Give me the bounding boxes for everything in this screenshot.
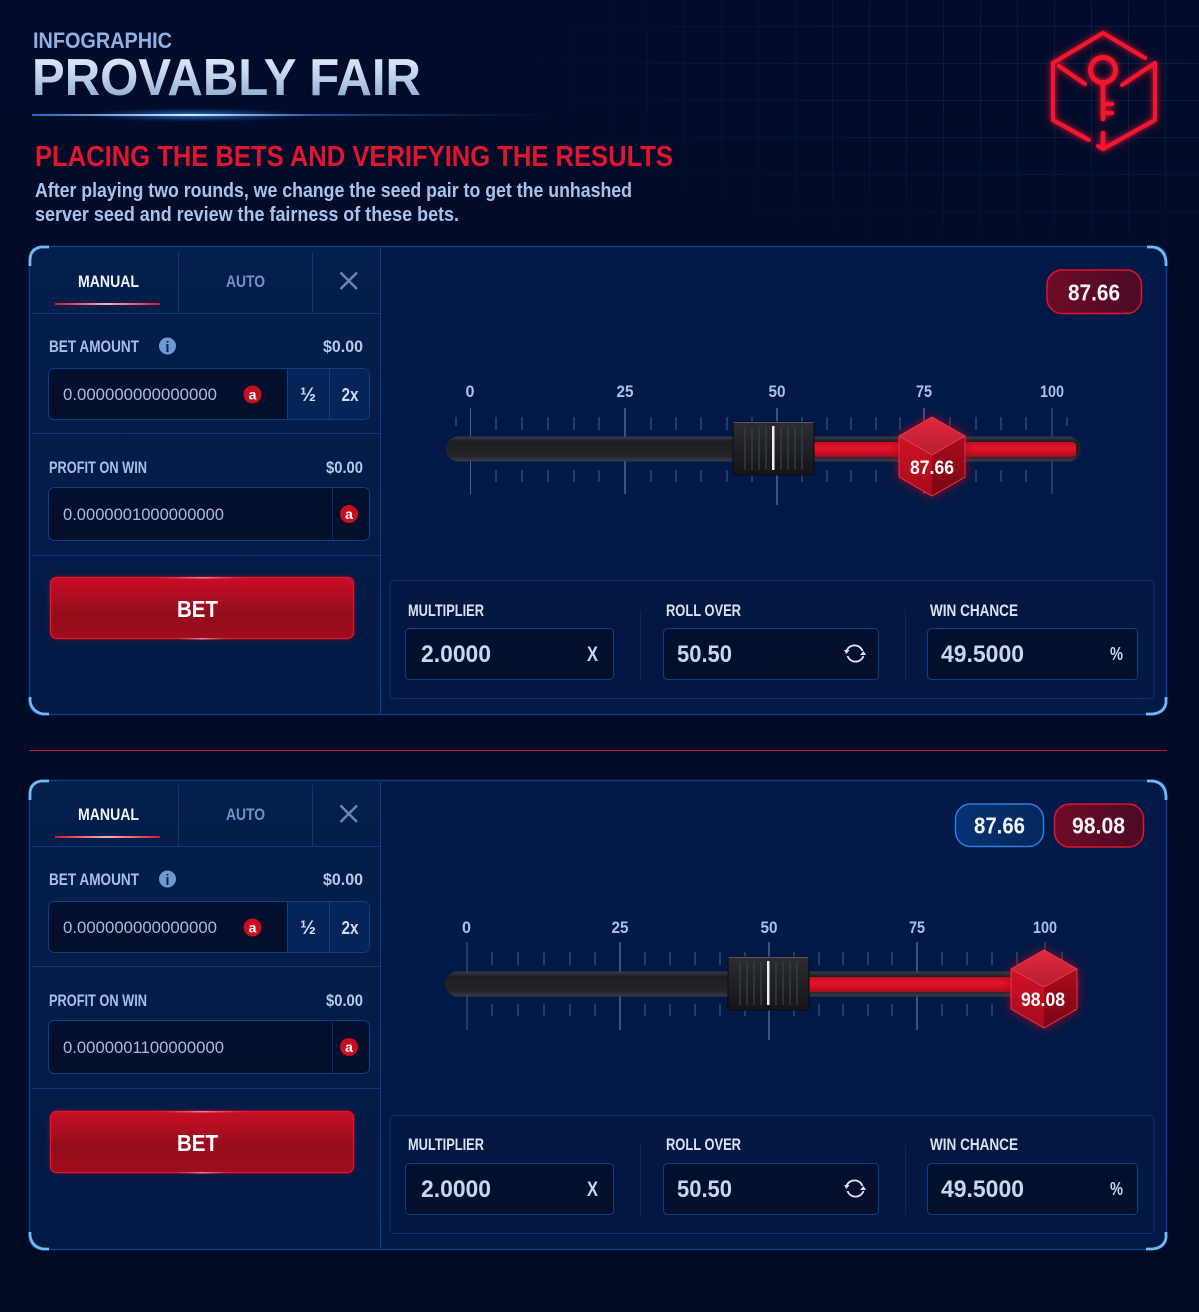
section heading: PLACING THE BETS AND VERIFYING THE RESULTS: [35, 141, 673, 173]
label: profit on win: PROFIT ON WIN: [49, 458, 147, 477]
bet button: [50, 577, 354, 640]
input: profit on win: [48, 488, 370, 540]
icon: info: i: [165, 339, 170, 356]
result cube: 98.08: 98.08: [1021, 990, 1065, 1011]
icon: close: [340, 272, 357, 289]
tab: manual: MANUAL: [78, 272, 139, 291]
stats panel: [390, 1116, 1154, 1234]
win chance field: 49.5000: [941, 641, 1024, 668]
bet amount usd: $0.00: [323, 337, 363, 356]
result pill: 87.66: 87.66: [1068, 280, 1120, 306]
bet button: BET: [177, 596, 218, 622]
panel: second round: [30, 780, 1166, 1250]
scale labels: 50: [760, 918, 778, 937]
roll over field: [664, 1135, 878, 1214]
result pill: 98.08 red: [1054, 804, 1144, 847]
ticks: [467, 942, 1062, 1040]
result cube: 87.66: 87.66: [910, 458, 954, 479]
multiplier field: [406, 1135, 614, 1214]
scale labels: [466, 382, 1064, 401]
scale labels: [462, 918, 1057, 937]
corner brackets: [30, 781, 1166, 1249]
multiplier field: X: [587, 1178, 598, 1201]
left column: bet form: [32, 248, 380, 714]
input: profit on win: a: [345, 1039, 353, 1055]
stats panel: [390, 580, 1154, 698]
tab: manual: MANUAL: [78, 805, 139, 824]
corner brackets: [30, 247, 1166, 714]
multiplier field: [406, 601, 614, 680]
glowing title rule: [32, 108, 560, 122]
input: bet amount: a: [249, 920, 257, 936]
win chance field: WIN CHANCE: [930, 1135, 1018, 1154]
tab: manual: [55, 805, 160, 838]
scale labels: 100: [1040, 382, 1064, 401]
icon: info: [159, 870, 176, 889]
input: bet amount: 2x: [342, 918, 358, 938]
track: [446, 436, 1081, 462]
win chance field: %: [1110, 1179, 1123, 1199]
section description: After playing two rounds, we change the seed pair to get the unhashed: [35, 180, 632, 202]
result pill: 87.66 blue: [956, 804, 1044, 846]
result pill: 98.08 red: 98.08: [1072, 812, 1125, 838]
header: [32, 28, 421, 107]
result cube: 98.08: [1011, 950, 1077, 1028]
multiplier field: MULTIPLIER: [408, 1135, 484, 1154]
result cube: 87.66: [899, 417, 965, 496]
input: profit on win: 0.0000001100000000: [63, 1038, 224, 1057]
section description: [35, 180, 632, 226]
input: bet amount: a: [249, 386, 257, 402]
ticks: [456, 408, 1067, 505]
roll over field: 50.50: [677, 1176, 732, 1203]
slider: [446, 382, 1081, 505]
label: bet amount: BET AMOUNT: [49, 870, 139, 889]
label: bet amount: BET AMOUNT: [49, 337, 139, 356]
icon: cube with key: [1053, 33, 1155, 149]
eyebrow: infographic: INFOGRAPHIC: [33, 28, 172, 53]
win chance field: %: [1110, 644, 1123, 664]
icon: close: [340, 806, 357, 822]
icon: info: [159, 338, 176, 356]
win chance field: [928, 1135, 1138, 1214]
bet amount usd: $0.00: [323, 870, 363, 889]
roll over field: ROLL OVER: [666, 1135, 741, 1154]
bet button: [50, 1111, 354, 1174]
input: bet amount: 2x: [342, 385, 358, 405]
section description: server seed and review the fairness of these bets.: [35, 204, 459, 226]
input: bet amount: 0.000000000000000: [63, 918, 217, 937]
roll over field: [664, 601, 878, 680]
scale labels: 0: [466, 382, 474, 401]
win chance field: WIN CHANCE: [930, 601, 1018, 620]
red range: [806, 977, 1031, 992]
panel frame: [30, 246, 1166, 714]
input: profit on win: a: [345, 506, 353, 522]
roll over field: ROLL OVER: [666, 601, 741, 620]
scale labels: 50: [768, 382, 786, 401]
scale labels: 100: [1033, 918, 1057, 937]
input: profit on win: [48, 1020, 370, 1074]
roll over field: 50.50: [677, 641, 732, 668]
scale labels: 25: [612, 918, 628, 937]
red divider: [29, 750, 1167, 751]
scale labels: 75: [916, 382, 932, 401]
win chance field: [928, 601, 1138, 680]
multiplier field: 2.0000: [421, 1176, 491, 1203]
profit usd: $0.00: [326, 458, 363, 477]
icon: info: i: [165, 872, 170, 889]
scale labels: 0: [462, 918, 471, 937]
title: PROVABLY FAIR: [32, 49, 421, 107]
left column: bet form: [32, 782, 380, 1249]
input: bet amount: ½: [300, 918, 316, 939]
input: bet amount: [48, 902, 370, 952]
panel: first round: [30, 246, 1166, 714]
panel frame: [30, 780, 1166, 1250]
slider thumb: [733, 422, 814, 475]
win chance field: 49.5000: [941, 1176, 1024, 1203]
tab: auto: AUTO: [226, 805, 265, 824]
result pill: 87.66 blue: 87.66: [974, 812, 1025, 838]
track: [445, 972, 1080, 996]
slider: [445, 918, 1080, 1040]
profit usd: $0.00: [326, 991, 363, 1010]
scale labels: 25: [616, 382, 634, 401]
bet button: BET: [177, 1130, 218, 1156]
tab: manual: [55, 272, 160, 305]
input: profit on win: 0.0000001000000000: [63, 505, 224, 524]
input: bet amount: ½: [300, 385, 316, 406]
scale labels: 75: [909, 918, 925, 937]
multiplier field: 2.0000: [421, 641, 491, 668]
input: bet amount: 0.000000000000000: [63, 385, 217, 404]
multiplier field: X: [587, 643, 598, 666]
result pill: 87.66: [1047, 270, 1142, 314]
slider thumb: [728, 957, 809, 1010]
red range: [812, 442, 1076, 457]
multiplier field: MULTIPLIER: [408, 601, 484, 620]
label: profit on win: PROFIT ON WIN: [49, 991, 147, 1010]
input: bet amount: [48, 368, 370, 420]
tab: auto: AUTO: [226, 272, 265, 291]
